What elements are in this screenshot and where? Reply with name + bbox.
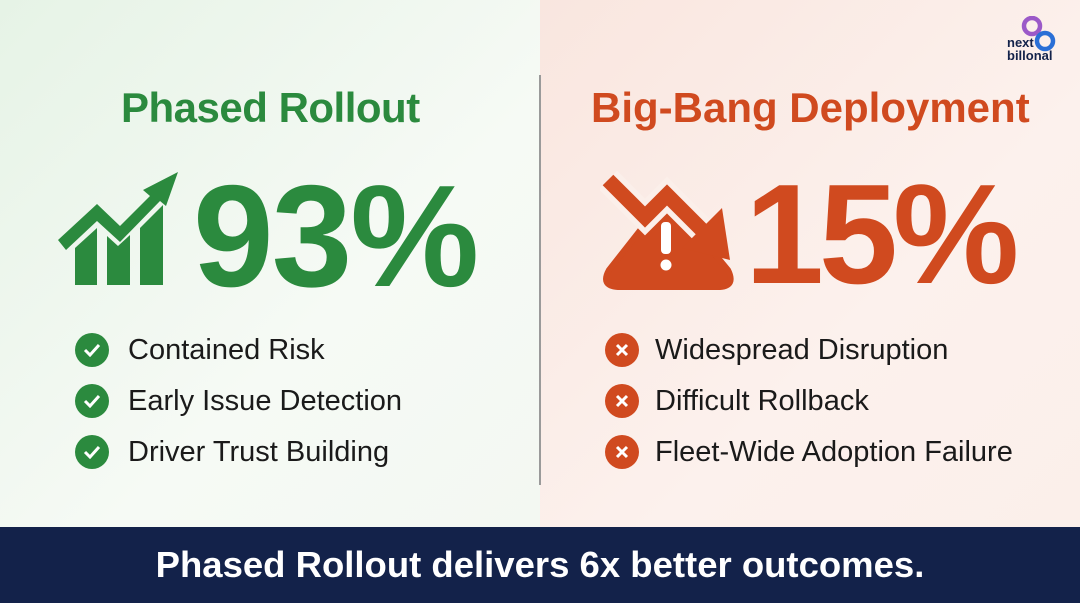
item: Fleet-Wide Adoption Failure [655,436,1013,468]
icon: falling warning [602,174,734,290]
list: big-bang drawbacks [605,333,1013,469]
panel: big-bang background [540,0,1080,527]
logo [1007,16,1056,63]
icon: growth chart [58,172,178,285]
number: 93%: 93% [193,155,477,317]
logo: billonal [1007,48,1052,63]
list: phased benefits [75,333,402,469]
panel: phased rollout background [0,0,540,527]
logo: next [1007,35,1034,50]
item: Contained Risk [128,334,325,366]
title: big-bang deployment: Big-Bang Deployment [591,84,1030,131]
item: Difficult Rollback [655,385,869,417]
title: phased rollout: Phased Rollout [121,84,420,131]
item: Widespread Disruption [655,334,948,366]
footer banner [0,527,1080,603]
item: Driver Trust Building [128,436,389,468]
footer banner: Phased Rollout delivers 6x better outcomes. [156,544,924,585]
item: Early Issue Detection [128,385,402,417]
number: 15%: 15% [745,155,1014,314]
